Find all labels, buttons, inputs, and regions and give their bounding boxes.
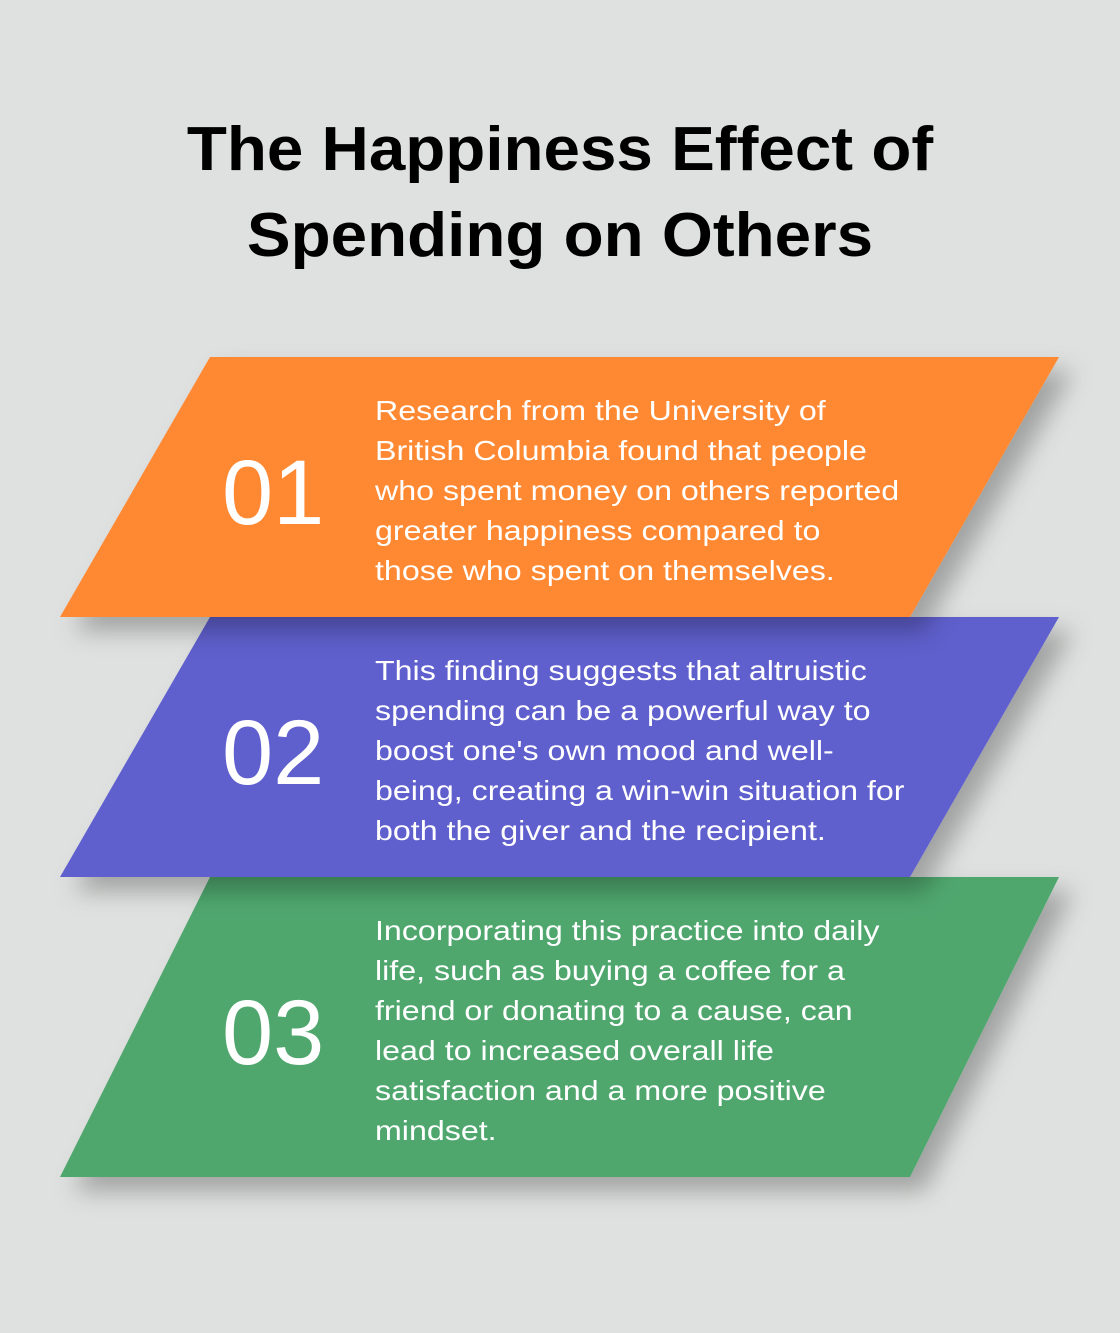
text block 03: life, such as buying a coffee for a — [375, 956, 845, 986]
number 02: 02 — [222, 702, 324, 804]
text block 02 — [375, 656, 905, 846]
text block 02: both the giver and the recipient. — [375, 816, 826, 846]
text block 01: British Columbia found that people — [375, 436, 867, 466]
text block 02: This finding suggests that altruistic — [375, 656, 867, 686]
panel: 01 — [60, 357, 1059, 617]
text block 02: being, creating a win-win situation for — [375, 776, 905, 806]
number 03: 03 — [222, 982, 324, 1084]
text block 01: those who spent on themselves. — [375, 556, 835, 586]
text block 01 — [374, 396, 899, 586]
text block 01: who spent money on others reported — [374, 476, 899, 506]
text block 03: Incorporating this practice into daily — [375, 916, 880, 946]
text block 01: Research from the University of — [375, 396, 826, 426]
title: Spending on Others — [247, 200, 873, 270]
text block 02: boost one's own mood and well- — [375, 736, 834, 766]
text block 03: lead to increased overall life — [375, 1036, 774, 1066]
text block 02: spending can be a powerful way to — [375, 696, 871, 726]
title: The Happiness Effect of — [187, 114, 934, 184]
panel: 02 — [60, 617, 1059, 877]
text block 03 — [375, 916, 880, 1146]
text block 01: greater happiness compared to — [375, 516, 820, 546]
title — [187, 114, 934, 270]
number 01: 01 — [222, 442, 324, 544]
text block 03: friend or donating to a cause, can — [375, 996, 853, 1026]
text block 03: mindset. — [375, 1116, 497, 1146]
panel: 03 — [60, 877, 1059, 1177]
text block 03: satisfaction and a more positive — [375, 1076, 826, 1106]
